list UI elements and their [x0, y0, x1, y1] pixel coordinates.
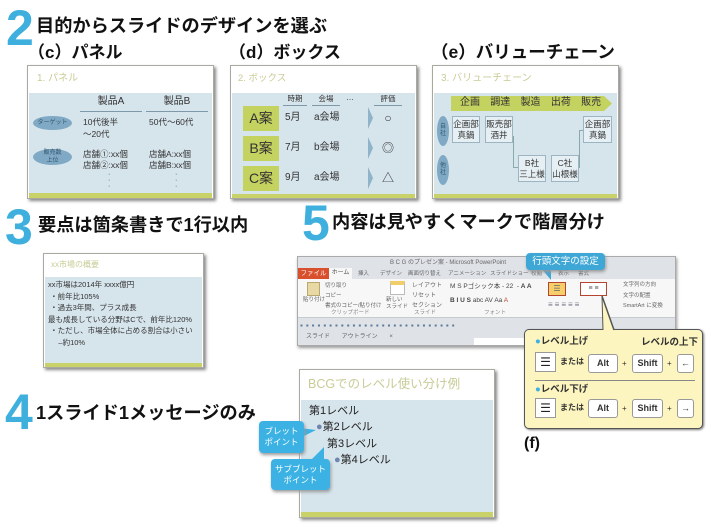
oval: own company: [437, 116, 449, 146]
callout: sub bullet point: [271, 459, 330, 490]
ellipsis B: [175, 171, 177, 190]
callout pointer: sub bullet: [312, 447, 324, 459]
slide body: [301, 400, 493, 514]
green footer bar: [434, 194, 617, 198]
key left: ←: [681, 358, 690, 368]
callout: bullet point: [259, 421, 304, 453]
font style row: B I U S abc AV Aa A: [450, 297, 508, 304]
slide text: ・前年比105%: [50, 292, 99, 300]
slide text: [48, 280, 193, 346]
arrow: [368, 107, 373, 129]
label (f): (f): [524, 435, 540, 452]
callout title: レベルの上下: [641, 337, 698, 348]
font name row: M S Pゴシック本 - 22 - A A: [450, 283, 532, 290]
slide body: [45, 277, 202, 364]
key alt: [588, 354, 618, 373]
connector lines: [513, 136, 519, 168]
slide text: xx市場は2014年 xxxx億円: [48, 280, 134, 289]
heading: (e) value chain: （e）バリューチェーン: [431, 42, 615, 62]
column head: rating: [374, 95, 402, 106]
label C: C案: [249, 170, 273, 186]
panel: PowerPoint ribbon: [297, 256, 676, 346]
oval: own company: 自: [440, 124, 446, 130]
slide body: [434, 93, 617, 195]
slide title: 3. バリューチェーン: [441, 73, 532, 84]
heading: (d) box: （d）ボックス: [229, 43, 341, 62]
panel: e value chain slide: [432, 65, 619, 199]
indent icon: [535, 352, 556, 372]
column head: venue: [312, 95, 340, 106]
file tab: ファイル: [300, 270, 326, 277]
ribbon body: [298, 279, 675, 318]
tab: transitions: 画面切り替え: [408, 271, 441, 277]
oval: target: [33, 116, 72, 130]
level down label: ●レベル下げ: [535, 384, 588, 395]
level 1: 第1レベル: [309, 405, 359, 417]
rating: ◎: [382, 141, 394, 155]
slide title: 1. パネル: [37, 73, 78, 84]
callout: sub bullet point: サブブレット: [275, 464, 326, 474]
paste icon: [307, 282, 320, 296]
label B: [243, 136, 279, 161]
slide text: ・ただし、市場全体に占める割合は小さい: [50, 326, 193, 335]
column head: product B: [146, 97, 208, 112]
store list A: 店舗②:xx個: [83, 160, 128, 170]
paragraph: indent buttons highlight: ≡ ≡: [588, 285, 599, 292]
number 2: 2: [6, 0, 34, 56]
row A: [243, 106, 392, 131]
box: company B: 三上様: [519, 169, 545, 179]
target text A: ～20代: [83, 129, 109, 139]
oval: other company: 社: [440, 170, 446, 176]
new slide label: スライド: [386, 304, 408, 310]
number 4: 4: [5, 384, 33, 440]
label A: A案: [249, 110, 273, 126]
label C: [243, 166, 279, 191]
connector lines right: [579, 130, 585, 168]
panel: market summary slide: [43, 253, 204, 368]
label: 行頭文字の設定: [532, 256, 599, 267]
callout: sub bullet point: ポイント: [283, 475, 318, 485]
slide title: xx市場の概要: [51, 260, 99, 269]
number 3: 3: [5, 199, 33, 255]
slide text: ・過去3年間、プラス成長: [50, 303, 137, 312]
text direction group: 文字の配置: [623, 292, 651, 298]
key shift: Shift: [638, 358, 658, 368]
ellipsis A: ·: [108, 183, 110, 190]
tab: view: 表示: [558, 271, 569, 277]
paragraph: bullet button highlight: ☰: [553, 284, 561, 293]
store list B: 店舗A:xx個: [149, 149, 191, 159]
slides commands: [412, 282, 442, 309]
column head: period: 時期: [288, 94, 302, 103]
pointer: [543, 270, 551, 280]
ellipsis A: ·: [108, 177, 110, 184]
slides commands: レイアウト: [412, 283, 442, 289]
home tab: ホーム: [332, 270, 349, 276]
box: sales: [485, 116, 513, 143]
tab: review: 校閲: [531, 271, 542, 277]
oval: other company: 他: [440, 163, 446, 169]
row C: [243, 166, 394, 191]
month: 9月: [285, 172, 301, 183]
key alt: [588, 399, 618, 418]
arrow: [368, 167, 373, 189]
rating: △: [382, 171, 394, 185]
key right: [677, 399, 694, 418]
level 4: ●第4レベル: [334, 454, 391, 466]
heading: choose slide design by purpose: 目的からスライドのデザインを選ぶ: [36, 16, 327, 36]
month: 7月: [285, 142, 301, 153]
new slide label: [386, 296, 408, 310]
box: company B: [518, 155, 546, 182]
key alt: Alt: [597, 403, 609, 413]
venue: a会場: [314, 112, 340, 123]
column head: ellipsis: …: [346, 93, 354, 102]
clipboard commands: 切り取り: [325, 283, 347, 289]
rating: ○: [384, 111, 392, 125]
box: planning right: 企画部: [585, 119, 610, 129]
tab: format: 書式: [578, 271, 589, 277]
divider: [535, 380, 695, 381]
panel: BCG level slide: [299, 369, 495, 518]
font group label: フォント: [484, 310, 506, 316]
panel: d box slide: [230, 65, 417, 199]
callout: bullet point: ブレット: [264, 426, 298, 436]
paragraph: bullet button highlight: [548, 282, 566, 296]
oval: top stores: [33, 149, 72, 165]
tab: animation: アニメーション: [448, 271, 486, 277]
new slide icon: [390, 281, 405, 295]
indent icon: ☰: [540, 355, 551, 369]
ellipsis B: ·: [175, 171, 177, 178]
quick access toolbar: ▪▪▪▪▪▪▪▪▪▪▪▪▪▪▪▪▪▪▪▪▪▪▪▪▪▪▪: [300, 321, 458, 330]
level 3: 第3レベル: [327, 438, 377, 450]
column head: product A: [80, 97, 142, 112]
arrow: [368, 137, 373, 159]
plus: +: [622, 404, 627, 413]
tab: slideshow: スライドショー: [490, 271, 529, 277]
clipboard group label: クリップボード: [331, 310, 370, 316]
month: 5月: [285, 112, 301, 123]
slide text: 最も成長している分野はCで、前年比120%: [48, 314, 192, 324]
key alt: Alt: [597, 358, 609, 368]
target text B: 50代～60代: [149, 117, 193, 127]
row B: [243, 136, 394, 161]
oval: top stores: 上位: [46, 158, 58, 164]
target text A: 10代後半: [83, 117, 118, 127]
outdent icon: ☰: [540, 401, 551, 415]
number 5: 5: [302, 195, 330, 251]
white editing strip: [474, 338, 675, 345]
box: planning right: [583, 116, 612, 143]
oval: target: ターゲット: [37, 120, 68, 126]
paragraph alignment row: ≡≡≡≡≡: [548, 300, 581, 309]
slides commands: セクション: [412, 303, 442, 309]
clipboard commands: [325, 282, 382, 309]
level down group: [535, 384, 694, 418]
venue: b会場: [314, 142, 340, 153]
oval: own company: 社: [440, 131, 446, 137]
box: planning: 企画部: [453, 119, 479, 129]
text direction group: [623, 281, 663, 309]
callout: bullet point: ポイント: [264, 437, 298, 447]
slides group label: スライド: [414, 310, 436, 316]
slides commands: リセット: [412, 293, 436, 299]
chain arrow: [451, 96, 612, 111]
heading: (c) panel: （c）パネル: [28, 43, 122, 62]
ribbon tabs: [358, 270, 589, 277]
callout: level up and down: [524, 329, 703, 429]
plus: +: [667, 359, 672, 368]
column head: venue: 会場: [318, 94, 334, 103]
callout: bullet setting label: [525, 253, 608, 280]
level up label: ●レベル上げ: [535, 336, 588, 347]
store list B: 店舗B:xx個: [149, 160, 191, 170]
key shift: Shift: [638, 403, 658, 413]
green footer bar: [301, 512, 493, 517]
level up group: [535, 336, 694, 373]
paragraph: indent buttons highlight: [580, 282, 607, 296]
slide text: –約10%: [58, 338, 85, 346]
slide body: [232, 93, 415, 195]
heading: hierarchy: 内容は見やすくマークで階層分け: [332, 212, 605, 232]
store list A: 店舗①:xx個: [83, 149, 128, 159]
store list A: [83, 149, 128, 170]
plus: +: [667, 404, 672, 413]
box: company B: B社: [525, 158, 539, 168]
column head: period: [283, 95, 307, 106]
box: planning right: 真鍋: [589, 130, 606, 140]
target text A: [83, 117, 118, 139]
column head: rating: 評価: [380, 94, 396, 103]
store list B: [149, 149, 191, 170]
file tab: [298, 268, 329, 279]
clipboard commands: コピー: [325, 293, 342, 299]
slide body: [29, 93, 212, 193]
ellipsis A: ·: [108, 171, 110, 178]
paste label: 貼り付け: [303, 297, 325, 303]
key shift: [632, 354, 663, 373]
tab: design: デザイン: [380, 271, 402, 277]
chain labels: 企画 調達 製造 出荷 販売: [460, 97, 601, 108]
label: [526, 253, 605, 270]
key right: →: [681, 403, 690, 413]
text direction group: 文字列の方向: [623, 282, 656, 288]
or: または: [560, 403, 584, 412]
green footer bar: [232, 194, 415, 198]
panel: c panel slide: [27, 65, 214, 199]
oval: top stores: 販売数: [43, 150, 62, 156]
home tab: [329, 268, 352, 279]
box: company C: 山根様: [552, 169, 578, 179]
slide tabs: スライド アウトライン ×: [306, 334, 393, 340]
green footer bar: [45, 363, 202, 367]
text direction group: SmartArt に変換: [623, 303, 663, 309]
label B: B案: [249, 140, 273, 156]
green footer bar: [29, 193, 212, 198]
column head: product B: 製品B: [164, 96, 190, 107]
venue: a会場: [314, 172, 340, 183]
label A: [243, 106, 279, 131]
box: planning: [452, 116, 480, 143]
key shift: [632, 399, 663, 418]
box: sales: 酒井: [490, 130, 508, 140]
plus: +: [622, 359, 627, 368]
box: sales: 販売部: [486, 119, 512, 129]
box: company C: C社: [558, 158, 572, 168]
ellipsis A: [108, 171, 110, 190]
slide title: 2. ボックス: [238, 73, 286, 84]
heading: bullet points: 要点は箇条書きで1行以内: [38, 215, 248, 235]
level 2: ●第2レベル: [316, 421, 373, 433]
box: planning: 真鍋: [457, 130, 474, 140]
key left: [677, 354, 694, 373]
ellipsis B: ·: [175, 183, 177, 190]
callout pointer: [601, 296, 614, 330]
box: company C: [551, 155, 579, 182]
oval: other company: [437, 155, 449, 185]
callout pointer: bullet: [304, 428, 316, 436]
heading: one message per slide: 1スライド1メッセージのみ: [36, 403, 256, 423]
column head: product A: 製品A: [98, 96, 124, 107]
or: または: [560, 357, 584, 366]
clipboard commands: 書式のコピー/貼り付け: [325, 303, 382, 309]
new slide label: 新しい: [386, 297, 403, 303]
slide title: BCGでのレベル使い分け例: [308, 377, 460, 391]
tab: insert: 挿入: [358, 271, 369, 277]
ribbon title text: B C G のプレゼン案 - Microsoft PowerPoint: [390, 260, 506, 266]
ellipsis B: ·: [175, 177, 177, 184]
outdent icon: [535, 398, 556, 418]
